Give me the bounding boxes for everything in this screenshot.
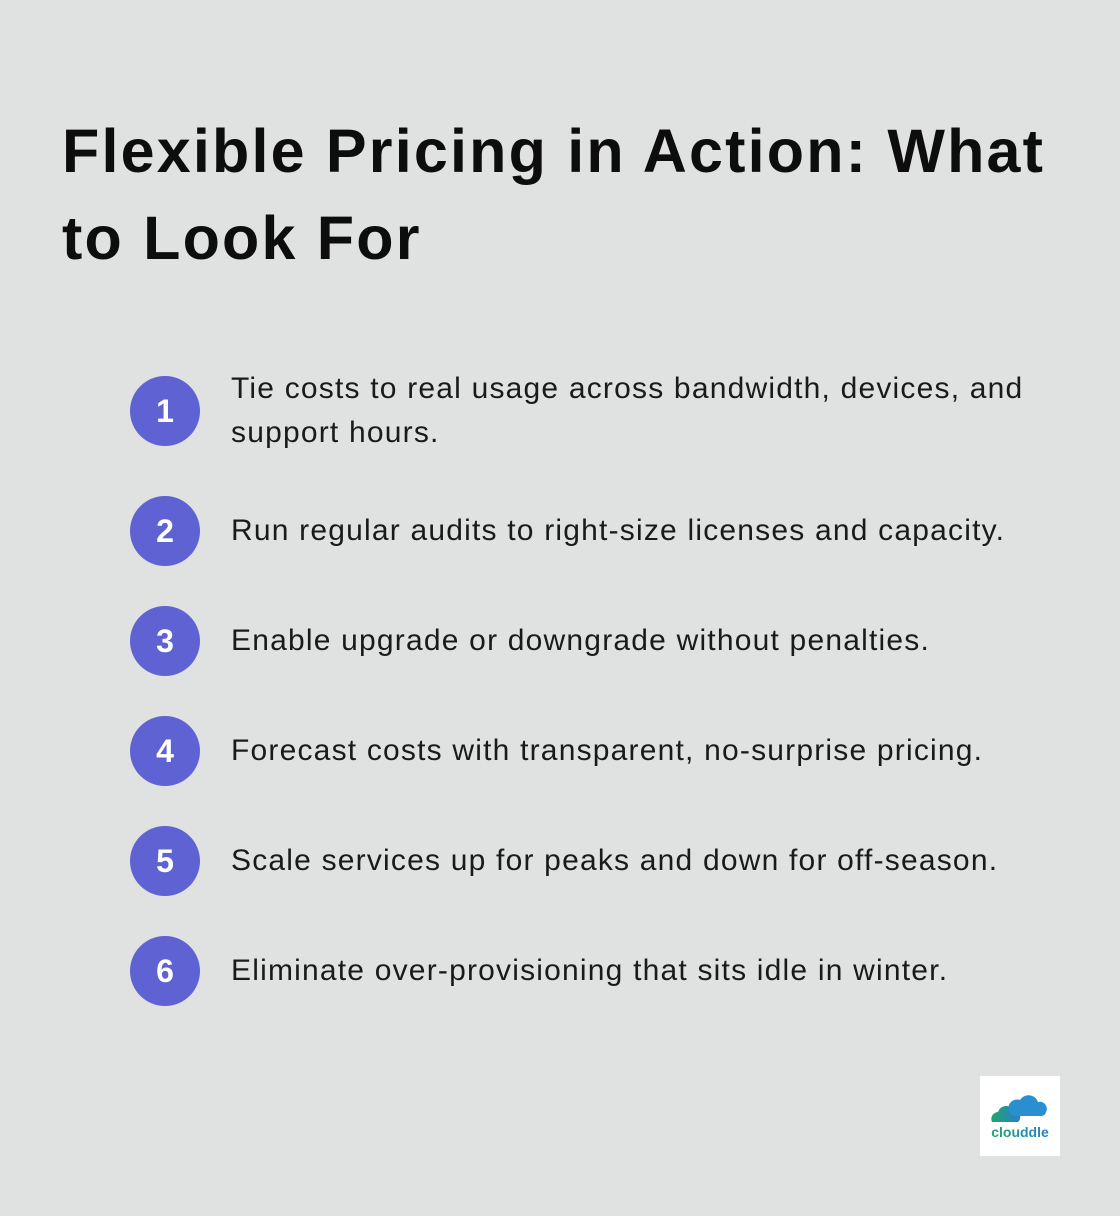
item 5: [130, 826, 998, 896]
item 3: [130, 606, 930, 676]
item 6: [130, 936, 948, 1006]
title: Flexible Pricing in Action: What to Look For: [62, 117, 1045, 272]
item 4: Forecast costs with transparent, no-surprise pricing.: [231, 734, 983, 767]
item 1: Tie costs to real usage across bandwidth, devices, and support hours.: [231, 372, 1023, 449]
circle 5: 5: [156, 843, 174, 879]
circle 1: [130, 376, 200, 446]
item 2: [130, 496, 1005, 566]
circle 2: [130, 496, 200, 566]
circle 3: [130, 606, 200, 676]
item 2: Run regular audits to right-size licenses and capacity.: [231, 514, 1005, 547]
logo: clouddle: [991, 1124, 1049, 1140]
circle 6: 6: [156, 953, 174, 989]
circle 1: 1: [156, 393, 174, 429]
circle 2: 2: [156, 513, 174, 549]
circle 3: 3: [156, 623, 174, 659]
logo: [980, 1076, 1060, 1156]
item 6: Eliminate over-provisioning that sits idle in winter.: [231, 954, 948, 987]
circle 5: [130, 826, 200, 896]
circle 4: [130, 716, 200, 786]
circle 4: 4: [156, 733, 174, 769]
item 5: Scale services up for peaks and down for off-season.: [231, 844, 998, 877]
item 3: Enable upgrade or downgrade without penalties.: [231, 624, 930, 657]
circle 6: [130, 936, 200, 1006]
item 4: [130, 716, 983, 786]
